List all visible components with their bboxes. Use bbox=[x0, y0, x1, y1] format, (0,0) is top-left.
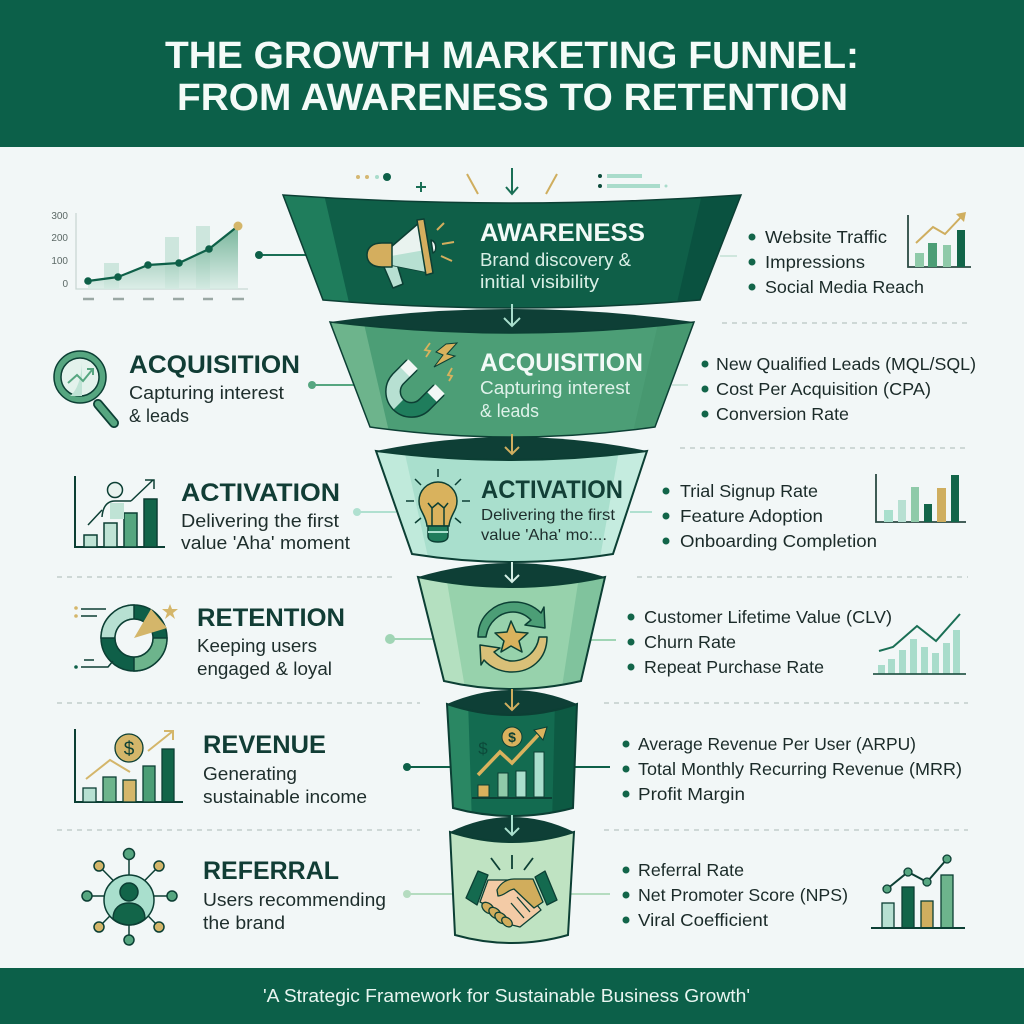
icon: magnifying glass bbox=[54, 351, 114, 423]
icon: coin chart: $ bbox=[124, 739, 135, 760]
right metrics: acquisition: New Qualified Leads (MQL/SQL) bbox=[716, 354, 976, 374]
label: acquisition: & leads bbox=[480, 401, 539, 421]
right metrics: revenue: Average Revenue Per User (ARPU) bbox=[638, 734, 916, 754]
footer band bbox=[0, 968, 1024, 1024]
label: awareness: AWARENESS bbox=[480, 219, 645, 247]
left block: referral bbox=[82, 848, 386, 945]
right metrics: activation: Onboarding Completion bbox=[680, 531, 877, 551]
label: activation bbox=[481, 476, 623, 544]
right metrics: retention: Churn Rate bbox=[644, 632, 736, 652]
flow arrows bbox=[504, 304, 520, 835]
right metrics: referral: Net Promoter Score (NPS) bbox=[638, 885, 848, 905]
label: activation: value 'Aha' mo:... bbox=[481, 527, 607, 544]
right metrics: retention bbox=[628, 607, 966, 677]
right metrics: referral: Referral Rate bbox=[638, 860, 744, 880]
funnel stage: retention bbox=[416, 563, 606, 690]
right metrics: retention: Customer Lifetime Value (CLV) bbox=[644, 607, 892, 627]
right metrics: revenue bbox=[622, 734, 962, 804]
title bbox=[165, 35, 859, 119]
left block: referral: REFERRAL bbox=[203, 857, 339, 885]
left chart: awareness traffic: 0 bbox=[62, 279, 68, 290]
label: awareness: Brand discovery & bbox=[480, 250, 631, 270]
right metrics: acquisition: Conversion Rate bbox=[716, 404, 849, 424]
label: acquisition: ACQUISITION bbox=[480, 349, 643, 377]
left block: acquisition: ACQUISITION bbox=[129, 351, 300, 379]
footer tagline: 'A Strategic Framework for Sustainable Business Growth' bbox=[263, 986, 750, 1006]
label: acquisition: Capturing interest bbox=[480, 378, 630, 398]
icon: revenue chart: $ bbox=[478, 739, 488, 758]
connector lines bbox=[255, 251, 737, 898]
right metrics: activation: Trial Signup Rate bbox=[680, 481, 818, 501]
title: FROM AWARENESS TO RETENTION bbox=[177, 77, 848, 119]
left block: activation: ACTIVATION bbox=[181, 479, 340, 507]
funnel stage: revenue bbox=[446, 690, 578, 817]
icon: referral network bbox=[82, 848, 177, 945]
chart: awareness mini bars bbox=[908, 212, 971, 267]
right metrics: awareness: Social Media Reach bbox=[765, 277, 924, 297]
left block: revenue: Generating bbox=[203, 764, 297, 784]
right metrics: activation: Feature Adoption bbox=[680, 506, 823, 526]
right metrics: referral bbox=[622, 855, 965, 930]
icon: megaphone bbox=[367, 219, 454, 288]
right metrics: referral: Viral Coefficient bbox=[638, 910, 768, 930]
left block: referral: the brand bbox=[203, 913, 285, 933]
chart: retention mini bars with line bbox=[873, 614, 966, 674]
left block: referral: Users recommending bbox=[203, 890, 386, 910]
icon: revenue chart bbox=[472, 727, 552, 798]
header band bbox=[0, 0, 1024, 147]
left block: activation: value 'Aha' moment bbox=[181, 533, 350, 553]
left block: revenue bbox=[75, 729, 367, 807]
chart: referral bars with line bbox=[871, 855, 965, 928]
left chart: awareness traffic bbox=[51, 211, 248, 299]
right metrics: retention: Repeat Purchase Rate bbox=[644, 657, 824, 677]
left block: activation bbox=[75, 476, 350, 553]
right metrics: revenue: Profit Margin bbox=[638, 784, 745, 804]
left chart: awareness traffic: 200 bbox=[51, 233, 68, 244]
label: acquisition bbox=[480, 349, 643, 421]
funnel stage: activation bbox=[374, 438, 648, 563]
left block: retention: engaged & loyal bbox=[197, 659, 332, 679]
right metrics: activation bbox=[662, 474, 966, 551]
icon: revenue chart: $ bbox=[508, 729, 516, 745]
left block: retention: Keeping users bbox=[197, 636, 317, 656]
label: awareness bbox=[480, 219, 645, 292]
icon: light bulb bbox=[406, 469, 470, 542]
funnel stage: awareness bbox=[282, 194, 742, 309]
label: awareness: initial visibility bbox=[480, 272, 599, 292]
icon: donut chart with star bbox=[74, 604, 178, 671]
top decorative marks bbox=[356, 168, 668, 194]
left block: retention bbox=[74, 604, 345, 679]
icon: person with bar chart bbox=[75, 476, 165, 547]
left chart: awareness traffic: 100 bbox=[51, 256, 68, 267]
right metrics: acquisition: Cost Per Acquisition (CPA) bbox=[716, 379, 931, 399]
right metrics: acquisition bbox=[702, 354, 976, 424]
chart: activation mini bars bbox=[876, 474, 966, 522]
label: activation: ACTIVATION bbox=[481, 476, 623, 504]
funnel stage: acquisition bbox=[330, 309, 700, 445]
left block: activation: Delivering the first bbox=[181, 511, 339, 531]
icon: magnet bbox=[393, 343, 457, 410]
icon: coin chart bbox=[75, 729, 183, 802]
right metrics: awareness: Website Traffic bbox=[765, 227, 887, 247]
left block: retention: RETENTION bbox=[197, 604, 345, 632]
left block: revenue: sustainable income bbox=[203, 787, 367, 807]
left block: acquisition: Capturing interest bbox=[129, 383, 284, 403]
icon: handshake bbox=[466, 855, 557, 929]
right metrics: awareness bbox=[748, 212, 971, 297]
left block: acquisition: & leads bbox=[129, 406, 189, 426]
icon: cycle with star bbox=[478, 602, 547, 672]
left block: acquisition bbox=[54, 351, 300, 426]
left chart: awareness traffic: 300 bbox=[51, 211, 68, 222]
left block: revenue: REVENUE bbox=[203, 731, 326, 759]
right metrics: revenue: Total Monthly Recurring Revenue (MRR) bbox=[638, 759, 962, 779]
label: activation: Delivering the first bbox=[481, 507, 616, 524]
right metrics: awareness: Impressions bbox=[765, 252, 865, 272]
title: THE GROWTH MARKETING FUNNEL: bbox=[165, 35, 859, 77]
funnel stage: referral bbox=[450, 817, 574, 943]
